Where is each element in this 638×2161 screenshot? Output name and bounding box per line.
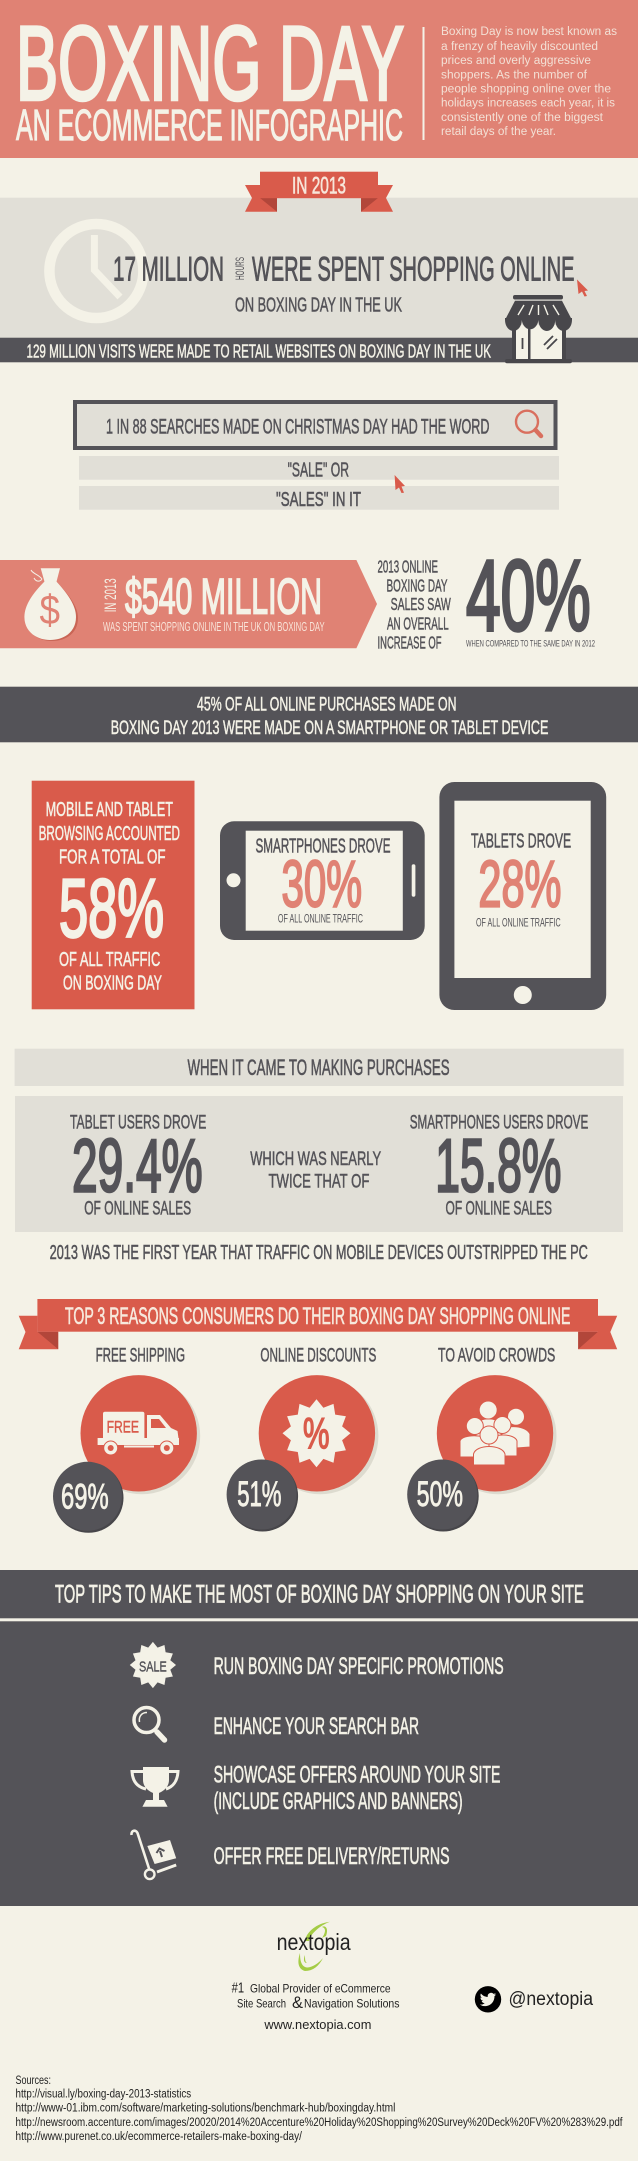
panel: 17 million hours band: [0, 198, 638, 338]
tip: promotions: [130, 1642, 504, 1688]
badge: 69 percent: [53, 1462, 124, 1533]
reason: free shipping: FREE SHIPPING: [96, 1345, 185, 1367]
text: tagline: Navigation Solutions: [304, 1997, 400, 2011]
icon: trophy: [132, 1767, 178, 1807]
icon: magnifier: [134, 1708, 164, 1740]
intro text: [441, 26, 617, 138]
panel: purchases comparison: [15, 1096, 623, 1232]
tablet stat: TABLET USERS DROVE: [70, 1111, 206, 1133]
text: overall increase: BOXING DAY: [386, 575, 448, 595]
icon: magnifier: [516, 411, 541, 436]
intro text: shoppers. As the number of: [441, 69, 588, 81]
panel: search box: [75, 402, 556, 448]
icon: truck: [98, 1412, 179, 1455]
intro text: holidays increases each year, it is: [441, 98, 615, 110]
logo: nextopia: [277, 1922, 351, 1971]
text: sources: [16, 2075, 623, 2143]
smartphone stat: OF ONLINE SALES: [446, 1197, 552, 1219]
text: tagline: #1: [232, 1980, 244, 1997]
panel: 540 million arrow: [0, 560, 377, 648]
text: overall increase: [378, 556, 451, 652]
heading: making purchases: WHEN IT CAME TO MAKING PURCHASES: [188, 1055, 450, 1080]
comparison text: WHICH WAS NEARLY: [250, 1148, 381, 1170]
text: twitter handle: @nextopia: [508, 1989, 593, 2010]
logo: nextopia: nextopia: [277, 1929, 351, 1955]
text: tagline: Site Search: [237, 1997, 286, 2011]
smartphone text: 30%: [282, 848, 362, 921]
intro text: a frenzy of heavily discounted: [441, 41, 598, 53]
badge: 50 percent: 50%: [417, 1475, 463, 1514]
badge: 51 percent: [227, 1460, 298, 1532]
text: tagline: [232, 1980, 400, 2032]
icon: smartphone: [220, 821, 425, 940]
ribbon: in 2013: [245, 172, 393, 212]
banner: 45 percent: [0, 687, 638, 742]
tip: showcase offers: (INCLUDE GRAPHICS AND BANNERS): [214, 1789, 463, 1815]
stat: 58 percent: 58%: [59, 863, 164, 955]
smartphone text: SMARTPHONES DROVE: [256, 835, 390, 857]
intro text: people shopping online over the: [441, 83, 611, 95]
panel: 58 percent: ON BOXING DAY: [63, 972, 162, 994]
icon: truck: FREE: [107, 1418, 139, 1436]
tip: free delivery: [131, 1831, 450, 1879]
banner: 45 percent: 45% OF ALL ONLINE PURCHASES MADE ON: [197, 694, 456, 716]
search result: sales: [79, 486, 559, 511]
intro text: retail days of the year.: [441, 126, 556, 138]
text: tagline: www.nextopia.com: [263, 2017, 371, 2032]
text: sources: http://www-01.ibm.com/software/marketing-solutions/benchmark-hub/boxingday.html: [16, 2103, 395, 2115]
search result: sale: "SALE" OR: [288, 460, 349, 482]
text: sources: Sources:: [16, 2075, 51, 2087]
reason: online discounts: [227, 1345, 378, 1532]
tip: search bar: [134, 1708, 419, 1740]
tablet text: OF ALL ONLINE TRAFFIC: [476, 916, 561, 930]
stat subtext: ON BOXING DAY IN THE UK: [235, 295, 402, 317]
tablet stat: [70, 1111, 206, 1219]
icon: store: [505, 295, 572, 363]
tablet text: 28%: [478, 848, 561, 921]
tablet text: TABLETS DROVE: [471, 830, 571, 852]
panel: 58 percent: OF ALL TRAFFIC: [59, 949, 160, 971]
panel: top tips: [0, 1621, 638, 1906]
reason: online discounts: ONLINE DISCOUNTS: [260, 1345, 376, 1367]
icon: clock: [49, 224, 143, 318]
tip: free delivery: OFFER FREE DELIVERY/RETURNS: [214, 1844, 450, 1870]
intro text: consistently one of the biggest: [441, 112, 604, 124]
badge: 69 percent: 69%: [61, 1477, 109, 1516]
tip: search bar: ENHANCE YOUR SEARCH BAR: [214, 1714, 419, 1740]
icon: crowd: [460, 1401, 530, 1465]
reason: avoid crowds: TO AVOID CROWDS: [438, 1345, 555, 1367]
smartphone text: OF ALL ONLINE TRAFFIC: [278, 911, 363, 925]
panel: 58 percent: FOR A TOTAL OF: [59, 846, 166, 868]
comparison text: [250, 1148, 381, 1193]
icon: twitter: [475, 1986, 501, 2013]
intro text: prices and overly aggressive: [441, 55, 591, 67]
label: in 2013: IN 2013: [102, 578, 120, 612]
text: tagline: Global Provider of eCommerce: [250, 1982, 391, 1996]
tablet stat: OF ONLINE SALES: [84, 1197, 191, 1219]
reason: free shipping: [53, 1345, 200, 1533]
badge: 50 percent: [407, 1460, 479, 1532]
tip: showcase offers: [132, 1762, 500, 1815]
text: sources: http://visual.ly/boxing-day-2013-statistics: [16, 2089, 191, 2101]
reason: avoid crowds: [407, 1345, 556, 1532]
badge: 51 percent: 51%: [237, 1475, 282, 1514]
icon: sale badge: [130, 1642, 176, 1688]
text: overall increase: INCREASE OF: [378, 632, 442, 652]
icon: cursor: [395, 475, 405, 493]
stat: 17 million: 17 MILLION: [113, 251, 224, 289]
stat: 540 million: $540 MILLION: [125, 568, 322, 624]
icon: cursor: [577, 280, 588, 296]
icon: money bag: $: [40, 586, 60, 633]
smartphone text: [256, 835, 390, 925]
tablet text: [471, 830, 571, 930]
icon: hand truck: [131, 1831, 176, 1879]
ribbon: top 3 reasons: [19, 1299, 617, 1349]
search result: sale: [79, 456, 559, 482]
text: overall increase: SALES SAW: [391, 594, 451, 614]
intro text: Boxing Day is now best known as: [441, 26, 617, 38]
smartphone stat: [410, 1111, 588, 1219]
icon: discount badge: [282, 1399, 350, 1467]
panel: 58 percent: [32, 781, 195, 1009]
text: overall increase: 2013 ONLINE: [378, 556, 438, 576]
tablet stat: 29.4%: [72, 1124, 203, 1208]
icon: tablet: [439, 782, 606, 1010]
panel: 58 percent: MOBILE AND TABLET: [46, 799, 173, 821]
panel: 58 percent: BROWSING ACCOUNTED: [39, 823, 180, 845]
heading: top tips: [0, 1570, 638, 1618]
icon: discount badge: %: [303, 1409, 330, 1458]
comparison text: TWICE THAT OF: [268, 1171, 369, 1193]
text: sources: http://www.purenet.co.uk/ecommerce-retailers-make-boxing-day/: [16, 2131, 303, 2143]
caption: WAS SPENT SHOPPING ONLINE IN THE UK ON BOXING DAY: [103, 620, 325, 634]
panel: header: [0, 0, 638, 158]
heading: making purchases: [15, 1049, 624, 1086]
label: hours: HOURS: [233, 257, 247, 280]
icon: money bag: [24, 568, 78, 641]
icon: sale badge: SALE: [139, 1660, 167, 1676]
ribbon: in 2013: IN 2013: [292, 172, 346, 200]
search result: sales: "SALES" IN IT: [276, 489, 361, 511]
text: overall increase: AN OVERALL: [387, 613, 449, 633]
text: tagline: &: [292, 1993, 304, 2012]
